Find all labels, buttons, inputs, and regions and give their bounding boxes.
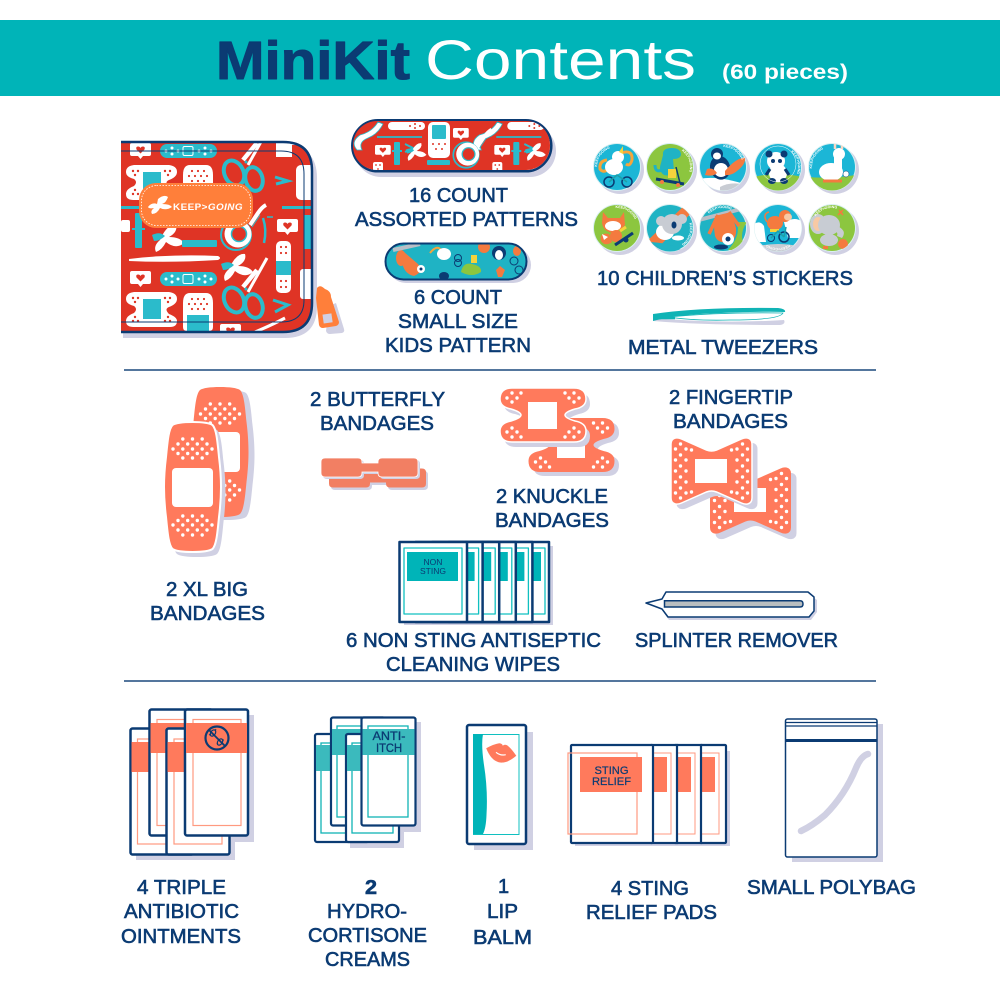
hydrocortisone creams	[315, 718, 421, 848]
red assorted bandage	[351, 119, 556, 177]
front wipe: NON	[424, 557, 442, 567]
label: 1 lip balm: 1	[498, 876, 509, 898]
front wipe: STING	[420, 566, 446, 576]
sticker: monkey: KEEP>GOING	[766, 244, 790, 250]
label: metal tweezers: METAL TWEEZERS	[628, 337, 818, 359]
sticker: penguin	[699, 143, 750, 194]
label: 2 hydro-cortisone creams: 2	[365, 877, 377, 899]
label: 4 triple antibiotic ointments	[121, 877, 241, 948]
label: 2 butterfly bandages: 2 BUTTERFLY	[310, 389, 445, 411]
label: 2 knuckle bandages: 2 KNUCKLE	[496, 486, 608, 508]
kit border	[121, 142, 312, 332]
label: 4 triple antibiotic ointments: OINTMENTS	[121, 926, 241, 948]
sticker: koala	[646, 204, 697, 255]
small polybag	[786, 719, 883, 862]
kit pouch	[121, 131, 344, 340]
sticker: unicorn	[593, 143, 644, 194]
label: 1 lip balm: LIP	[487, 901, 518, 923]
label: 6 non sting antiseptic cleaning wipes: CLEANING WIPES	[386, 654, 560, 676]
label: 1 lip balm	[473, 876, 532, 949]
sticker: llama	[808, 143, 859, 194]
label: 16 count: 16 COUNT	[409, 185, 508, 207]
sticker: llama: KEEP>GOING	[810, 147, 823, 168]
orange label	[139, 183, 253, 228]
label: 2 hydro-cortisone creams: CREAMS	[325, 949, 410, 971]
label: 2 knuckle bandages: BANDAGES	[495, 510, 609, 532]
xl big bandages	[164, 387, 254, 557]
label: 6 non sting antiseptic cleaning wipes	[346, 630, 601, 676]
label: 2 hydro-cortisone creams: CORTISONE	[308, 925, 427, 947]
sting relief pads: RELIEF	[592, 776, 631, 788]
sticker: dinosaur	[646, 143, 697, 194]
lip balm	[467, 725, 533, 850]
label: splinter remover: SPLINTER REMOVER	[635, 630, 838, 652]
sticker: monkey	[754, 204, 805, 255]
label: 16 count: ASSORTED PATTERNS	[355, 209, 578, 231]
label: 4 triple antibiotic ointments: ANTIBIOTIC	[124, 901, 239, 923]
zipper pull	[316, 286, 344, 334]
label: 2 hydro-cortisone creams: HYDRO-	[327, 901, 407, 923]
title: MiniKit	[216, 31, 410, 91]
sting relief pads: STING	[594, 765, 628, 777]
title: Contents	[425, 28, 696, 91]
sticker: penguin: KEEP>GOING	[724, 144, 744, 160]
label: 4 sting relief pads: RELIEF PADS	[586, 902, 717, 924]
splinter remover	[646, 592, 817, 620]
label: 6 count: KIDS PATTERN	[385, 335, 531, 357]
label: 1 lip balm: BALM	[473, 927, 532, 949]
title: (60 pieces)	[722, 61, 848, 84]
sting relief pads	[568, 745, 730, 846]
sticker: sloth	[699, 204, 750, 255]
hydrocortisone creams: ANTI-	[372, 729, 406, 743]
header bar	[0, 20, 1000, 96]
label: 6 non sting antiseptic cleaning wipes: 6 NON STING ANTISEPTIC	[346, 630, 601, 652]
label: 4 sting relief pads	[586, 878, 717, 924]
label: children's stickers: 10 CHILDREN’S STICKERS	[597, 268, 853, 290]
title	[216, 28, 848, 91]
label: 2 hydro-cortisone creams	[308, 877, 427, 971]
sticker: fox	[593, 204, 644, 255]
orange label: KEEP> GOING	[173, 202, 243, 212]
label: 6 count: 6 COUNT	[414, 287, 502, 309]
label: 6 count	[385, 287, 531, 357]
label: 2 knuckle bandages	[495, 486, 609, 532]
sticker: sloth: KEEP>GOING	[708, 206, 732, 214]
label: 4 sting relief pads: 4 STING	[611, 878, 689, 900]
sticker: elephant	[808, 204, 859, 255]
tweezers	[653, 308, 785, 325]
hydrocortisone creams: ITCH	[376, 741, 402, 755]
label: 2 fingertip bandages: BANDAGES	[673, 411, 788, 433]
sticker: panda: KEEP>GOING	[791, 150, 800, 174]
front wipe	[400, 542, 467, 622]
label: 2 xl big bandages: 2 XL BIG	[166, 579, 248, 601]
icon: lips	[484, 740, 518, 766]
icon: bacteria prohibited	[206, 726, 228, 750]
fingertip bandages	[671, 438, 796, 539]
butterfly bandages	[321, 458, 428, 490]
label: 2 fingertip bandages: 2 FINGERTIP	[669, 387, 793, 409]
sticker: dinosaur: KEEP>GOING	[682, 149, 692, 172]
label: 6 count: SMALL SIZE	[398, 311, 518, 333]
label: 4 triple antibiotic ointments: 4 TRIPLE	[137, 877, 226, 899]
sticker: panda	[754, 143, 805, 194]
sticker: koala: KEEP>GOING	[682, 222, 692, 246]
label: 16 count	[355, 185, 578, 231]
sticker: unicorn: KEEP>GOING	[594, 146, 610, 166]
label: 2 xl big bandages: BANDAGES	[150, 603, 265, 625]
kids bandage	[386, 241, 531, 283]
back wipes	[416, 542, 549, 622]
label: small polybag: SMALL POLYBAG	[747, 877, 916, 899]
kit stitching	[121, 151, 304, 322]
kit pattern	[121, 143, 311, 331]
label: 2 xl big bandages	[150, 579, 265, 625]
label: 2 butterfly bandages: BANDAGES	[320, 413, 434, 435]
children's stickers	[593, 143, 859, 255]
triple antibiotic ointments	[130, 710, 254, 860]
label: 2 butterfly bandages	[310, 389, 445, 435]
sticker: fox: KEEP>GOING	[616, 206, 637, 219]
sticker: elephant: KEEP>GOING	[814, 206, 837, 216]
label: 2 fingertip bandages	[669, 387, 793, 433]
knuckle bandages	[500, 388, 619, 476]
antiseptic wipes	[400, 542, 553, 625]
